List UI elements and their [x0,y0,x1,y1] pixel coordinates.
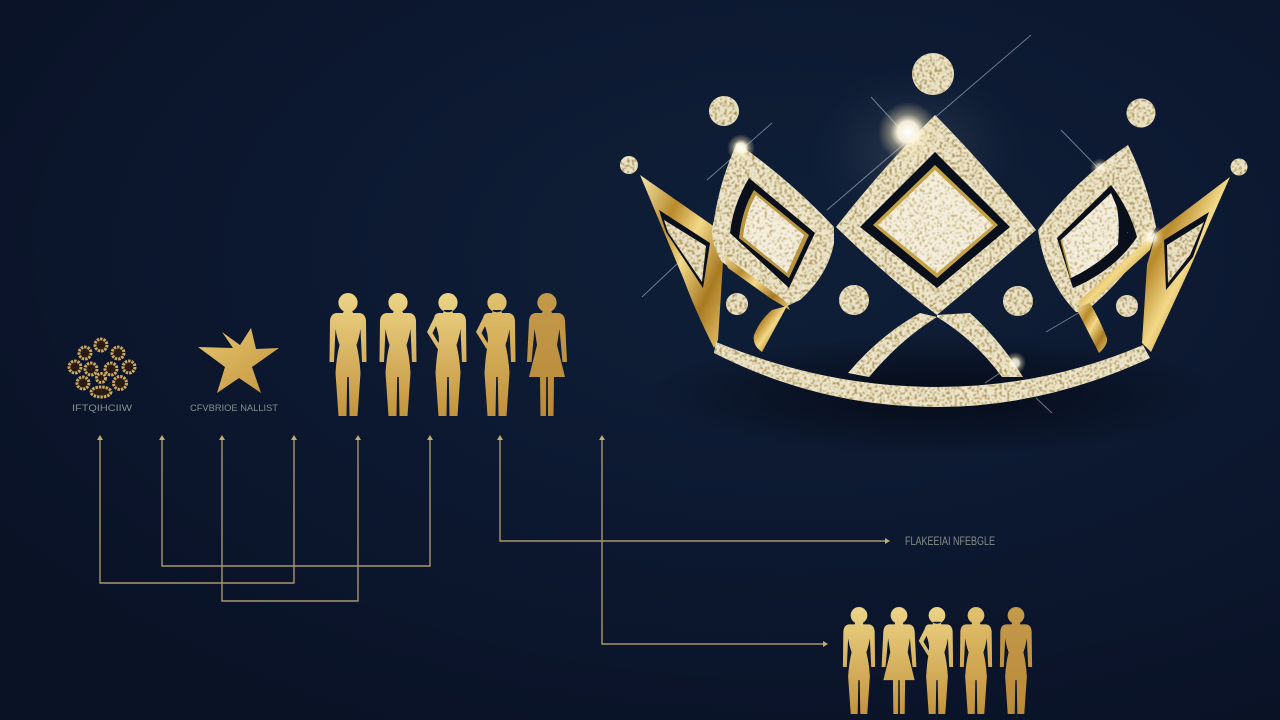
jewel dots [620,53,1248,317]
crown shadow [645,333,1225,457]
left diamond [712,143,834,310]
center diamond [836,115,1036,315]
connector lines [100,438,886,644]
left ribbon [754,306,787,352]
right diamond [1038,145,1156,312]
arrowheads [97,435,890,647]
icon: jewel cluster [69,339,135,397]
figures: lower group [843,607,1032,714]
crown [620,35,1248,413]
right gold point [1142,177,1230,352]
base band [714,342,1150,407]
left gold point [640,175,723,348]
icon: star [198,328,279,393]
label: connector: FLAKEEIAI NFEBGLE [905,536,995,548]
right ribbon [1076,303,1107,353]
label: star: CFVBRIOE NALLIST [190,403,279,413]
sparkles [727,102,1164,374]
star streaks [642,35,1100,413]
crown halo [805,65,1025,235]
label: jewel: IFTQIHCIIW [72,403,133,413]
crossed bands [848,313,1023,377]
figures: upper group [330,293,567,416]
